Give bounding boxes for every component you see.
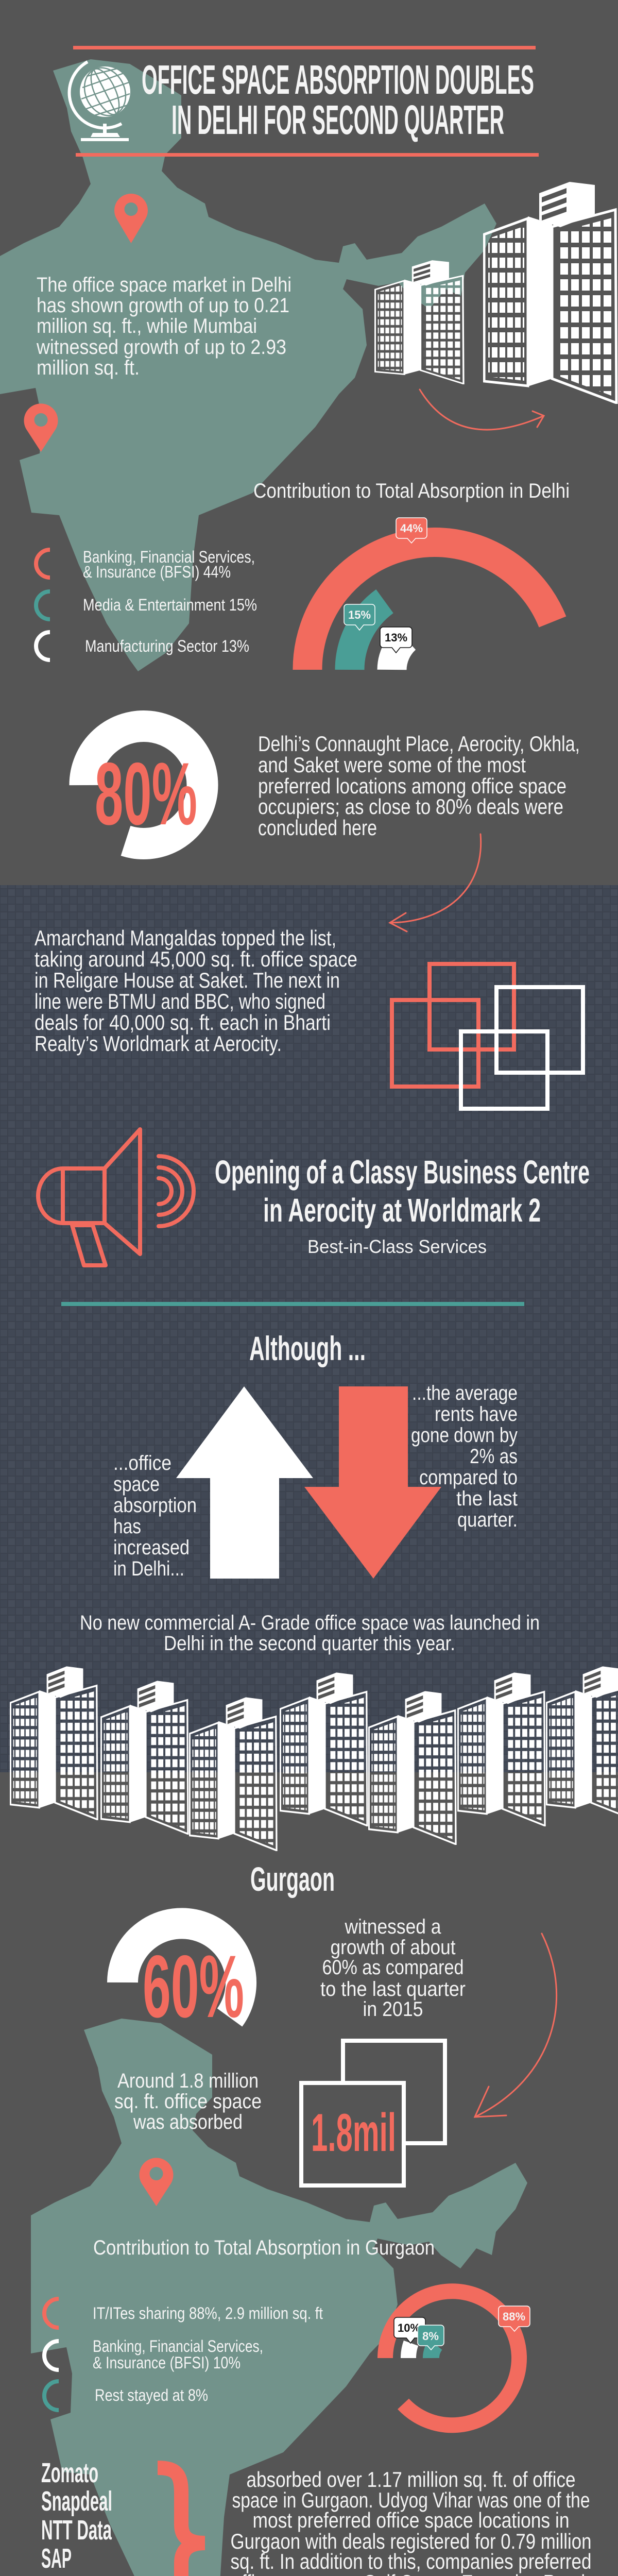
icon: map pin Gurgaon — [140, 2158, 174, 2206]
label: 44% — [396, 518, 427, 543]
text: Amarchand Mangaldas deals: Realty’s Worldmark at Aerocity. — [35, 1031, 282, 1056]
text: 60% growth: in 2015 — [363, 1998, 423, 2021]
legend: Delhi sectors — [36, 548, 257, 660]
background: patterned section — [0, 885, 618, 1772]
text: rents down: gone down by — [411, 1424, 518, 1447]
text: absorption increased: space — [113, 1473, 160, 1496]
text: no new A-grade space: Delhi in the second quarter this year. — [164, 1632, 455, 1655]
legend: Gurgaon sectors: IT/ITes sharing 88%, 2.9 million sq. ft — [93, 2304, 323, 2323]
text: rents down: 2% as — [470, 1445, 518, 1468]
legend: Delhi sectors: Banking, Financial Services, — [83, 548, 255, 566]
arrow: down red — [304, 1386, 441, 1579]
text: 1.8 million absorbed — [114, 2070, 262, 2133]
text: Delhi vs Mumbai growth: million sq. ft. — [37, 357, 140, 379]
chart: Delhi semicircle arcs: 13% — [385, 631, 407, 644]
text: no new A-grade space — [80, 1612, 540, 1655]
title — [142, 57, 534, 143]
chart: Delhi semicircle arcs — [307, 518, 553, 670]
icon: map pin Mumbai — [24, 403, 58, 452]
icon: megaphone — [38, 1129, 194, 1265]
chart: Gurgaon ring — [385, 2291, 530, 2425]
text: absorption increased: absorption — [113, 1494, 197, 1517]
text: Amarchand Mangaldas deals: taking around 45,000 sq. ft. office space — [35, 947, 357, 971]
text: rents down — [411, 1382, 518, 1531]
text: rents down: the last — [456, 1487, 518, 1510]
legend: Gurgaon sectors: & Insurance (BFSI) 10% — [93, 2353, 241, 2372]
legend: Gurgaon sectors: Banking, Financial Services, — [93, 2337, 263, 2355]
text: rents down: ...the average — [412, 1382, 518, 1404]
label: 10%: 10% — [398, 2321, 420, 2334]
text: Amarchand Mangaldas deals: deals for 40,000 sq. ft. each in Bharti — [35, 1010, 331, 1035]
list: companies: NTT Data — [41, 2515, 112, 2546]
heading: contribution in Delhi: Contribution to Total Absorption in Delhi — [253, 480, 570, 502]
text: rents down: quarter. — [457, 1509, 518, 1531]
chart: 60% ring — [123, 1923, 244, 2036]
background: top dark section — [0, 0, 618, 885]
heading: contribution in Gurgaon: Contribution to Total Absorption in Gurgaon — [93, 2236, 435, 2259]
list: companies: Zomato — [41, 2458, 98, 2488]
text: absorption increased: increased — [113, 1536, 190, 1559]
arrow: curved to 1.8mil — [475, 1934, 557, 2117]
text: preferred locations — [258, 732, 580, 840]
icon: 1.8mil squares: 1.8mil — [311, 2103, 396, 2163]
legend: Gurgaon sectors — [44, 2299, 323, 2410]
icon: buildings large — [484, 182, 616, 403]
text: preferred locations: concluded here — [258, 816, 377, 840]
illustration: skyline — [10, 1666, 618, 1851]
text: no new A-grade space: No new commercial A- Grade office space was launched in — [80, 1612, 540, 1634]
legend: Delhi sectors: Manufacturing Sector 13% — [85, 637, 249, 655]
chart: Delhi semicircle arcs: 15% — [348, 608, 371, 621]
text: Amarchand Mangaldas deals — [35, 926, 357, 1056]
text: Delhi vs Mumbai growth — [36, 274, 291, 379]
chart: 80% ring — [85, 726, 202, 844]
heading: although: Although ... — [249, 1329, 366, 1367]
text: rents down: compared to — [419, 1466, 518, 1489]
text: 60% growth — [320, 1916, 466, 2021]
text: Delhi vs Mumbai growth: witnessed growth of up to 2.93 — [36, 336, 286, 359]
text: 60% growth: 60% as compared — [322, 1956, 464, 1979]
arrow: curved to chart — [420, 389, 544, 430]
text: 1.8 million absorbed: was absorbed — [133, 2111, 243, 2133]
icon: globe — [70, 61, 133, 141]
title rule bottom — [76, 153, 539, 157]
map: India (Gurgaon section) — [31, 2019, 527, 2576]
text: 60% growth: growth of about — [331, 1936, 455, 1959]
divider teal — [61, 1302, 524, 1306]
icon: curly brace — [158, 2468, 205, 2576]
arrow: up white — [176, 1386, 313, 1579]
subheading: best-in-class: Best-in-Class Services — [307, 1236, 487, 1257]
map: India (Delhi section) — [0, 59, 496, 671]
icon: 1.8mil squares — [301, 2041, 445, 2185]
list: companies: SAP — [41, 2543, 72, 2574]
heading: opening business centre — [215, 1154, 590, 1229]
text: 1.8 million absorbed: Around 1.8 million — [117, 2070, 259, 2092]
text: preferred locations: and Saket were some of the most — [258, 753, 526, 777]
text: absorption increased — [113, 1452, 197, 1580]
text: absorption increased: in Delhi... — [113, 1557, 184, 1580]
label: 10% — [394, 2317, 425, 2343]
background: Gurgaon dark section — [0, 1772, 618, 2576]
text: Amarchand Mangaldas deals: in Religare House at Saket. The next in — [35, 968, 340, 992]
text: preferred locations: occupiers; as close to 80% deals were — [258, 794, 563, 819]
title rule top — [73, 46, 536, 49]
text: 1.8 million absorbed: sq. ft. office space — [114, 2090, 262, 2113]
text: Delhi vs Mumbai growth: has shown growth of up to 0.21 — [37, 294, 289, 317]
chart: Gurgaon ring: 88% — [503, 2310, 525, 2323]
icon: buildings small — [375, 260, 464, 384]
list: companies — [41, 2458, 122, 2576]
chart: 60% ring: 60% — [143, 1937, 244, 2036]
heading: Gurgaon: Gurgaon — [250, 1860, 335, 1898]
label: 44%: 44% — [400, 522, 423, 535]
text: absorption increased: ...office — [113, 1452, 171, 1475]
text: 60% growth: witnessed a — [345, 1916, 441, 1938]
text: Delhi vs Mumbai growth: The office space market in Delhi — [37, 274, 291, 296]
text: Gurgaon absorption details: most preferred office space locations in — [252, 2508, 570, 2532]
list: companies: Snapdeal — [41, 2486, 112, 2517]
text: Amarchand Mangaldas deals: Amarchand Mangaldas topped the list, — [35, 926, 336, 950]
text: Amarchand Mangaldas deals: line were BTMU and BBC, who signed — [35, 989, 325, 1013]
text: rents down: rents have — [435, 1403, 518, 1426]
icon: map pin Delhi — [114, 194, 148, 243]
legend: Delhi sectors: Media & Entertainment 15% — [83, 596, 257, 614]
legend: Delhi sectors: & Insurance (BFSI) 44% — [83, 563, 231, 581]
text: Gurgaon absorption details — [231, 2467, 591, 2576]
icon: overlapping squares — [392, 964, 583, 1109]
text: absorption increased: has — [113, 1515, 141, 1538]
arrow: curved down-left — [390, 834, 481, 931]
legend: Gurgaon sectors: Rest stayed at 8% — [95, 2386, 208, 2404]
chart: 80% ring: 80% — [95, 744, 197, 843]
text: Delhi vs Mumbai growth: million sq. ft., while Mumbai — [37, 315, 257, 337]
text: 60% growth: to the last quarter — [320, 1978, 466, 2001]
chart: Gurgaon ring: 8% — [422, 2330, 439, 2343]
